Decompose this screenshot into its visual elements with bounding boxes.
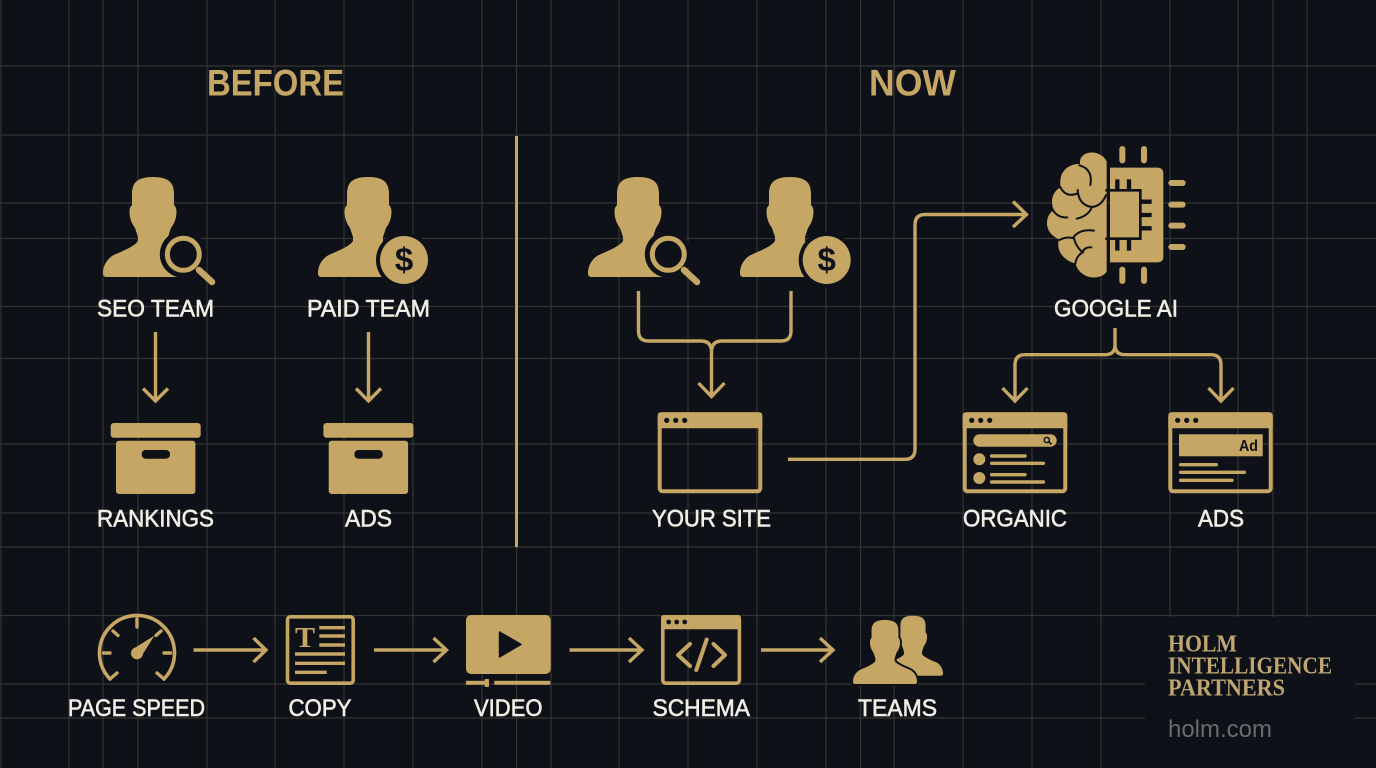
label: SCHEMA: SCHEMA (652, 695, 750, 722)
brand url: holm.com: holm.com (1168, 716, 1272, 743)
arrow: paid team to ads (356, 332, 381, 401)
icon: rankings box (111, 423, 201, 494)
label: GOOGLE AI: GOOGLE AI (1054, 296, 1178, 322)
arrow: copy to video (374, 638, 446, 662)
heading: NOW: NOW (869, 62, 956, 104)
icon: page speed gauge (100, 615, 174, 679)
arrow: Google AI splits to organic and ads (1002, 328, 1234, 401)
icon: organic results browser window (963, 412, 1067, 491)
brand name: Holm Intelligence Partners: PARTNERS (1168, 676, 1285, 702)
arrow: SEO team to rankings (143, 332, 168, 401)
arrow: schema to teams (761, 638, 833, 662)
label: ADS (before): ADS (345, 506, 392, 532)
heading: BEFORE: BEFORE (207, 62, 344, 104)
icon: copy document (288, 617, 353, 683)
arrow: your site to Google AI (788, 202, 1026, 459)
icon: ads box (323, 423, 413, 494)
brand name: Holm Intelligence Partners (1168, 632, 1332, 702)
brand name: Holm Intelligence Partners: INTELLIGENCE (1168, 654, 1332, 680)
icon: video player (466, 615, 551, 687)
icon: copy document: T (295, 622, 315, 654)
icon: paid team person with dollar coin: $ (395, 241, 413, 278)
label: VIDEO: VIDEO (474, 695, 542, 722)
icon: ads results browser window: Ad (1239, 438, 1258, 455)
label: TEAMS: TEAMS (858, 695, 937, 722)
brand name: Holm Intelligence Partners: HOLM (1168, 632, 1237, 658)
icon: Google AI brain and chip (1047, 149, 1183, 281)
icon: paid team person with dollar coin (318, 177, 432, 288)
label: RANKINGS: RANKINGS (97, 506, 214, 532)
icon: SEO team person with magnifier (103, 177, 212, 282)
icon: now paid person with dollar coin: $ (818, 241, 836, 278)
label: SEO TEAM: SEO TEAM (97, 296, 214, 322)
label: YOUR SITE: YOUR SITE (652, 506, 771, 532)
arrow: page speed to copy (194, 638, 266, 662)
icon: ads results browser window (1168, 412, 1273, 491)
arrow: video to schema (570, 638, 642, 662)
divider between before and now (515, 136, 518, 547)
icon: now SEO person with magnifier (588, 177, 697, 282)
icon: schema code window (661, 615, 741, 683)
label: ADS (now): ADS (1198, 506, 1244, 532)
icon: teams two people (853, 616, 943, 684)
icon: your site browser window (658, 412, 762, 491)
label: PAID TEAM: PAID TEAM (307, 296, 430, 322)
label: PAGE SPEED: PAGE SPEED (68, 695, 205, 722)
arrow: both teams merge into your site (638, 291, 791, 396)
label: ORGANIC: ORGANIC (963, 506, 1067, 532)
icon: now paid person with dollar coin (740, 177, 855, 288)
label: COPY: COPY (288, 695, 352, 722)
